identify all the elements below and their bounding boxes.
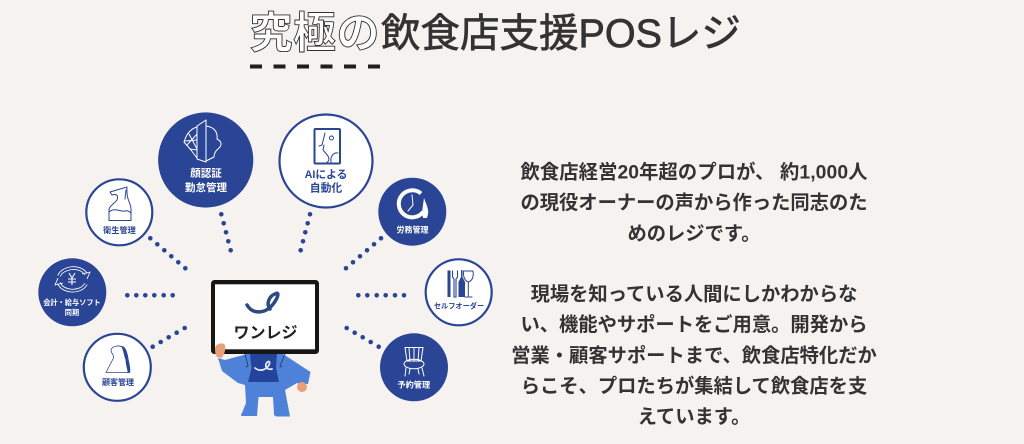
text block: description [511,284,877,428]
node: reservation management [380,333,448,401]
icon: tablet with AI face [314,129,340,164]
central figure: tablet head mascot [211,280,319,416]
node: hygiene management [86,179,152,245]
node: hygiene management: 衛生管理 [103,225,136,235]
node: AI automation: 自動化 [310,180,342,194]
icon: spray bottle [109,187,131,220]
node: reservation management: 予約管理 [397,380,430,390]
title [250,10,741,58]
logo wordmark: ワンレジ [233,325,298,342]
icon: chair [404,348,424,376]
text block: introduction: 飲食店経営20年超のプロが、 約1,000人 [520,160,868,184]
title: 飲食店支援POSレジ [381,12,741,56]
title: 究極の [250,10,380,58]
node: accounting and payroll software sync: 同期 [65,308,79,317]
node: AI automation [280,114,372,208]
dotted connectors [125,212,406,349]
text block: introduction: めのレジです。 [627,223,761,245]
left hand [215,343,225,358]
text block: introduction: の現役オーナーの声から作った同志のた [520,192,868,214]
text block: description: い、機能やサポートをご用意。開発から [520,313,868,336]
node: labor management: 労務管理 [396,224,428,234]
tablet frame [211,280,319,354]
icon: person silhouette [106,346,130,373]
text block: introduction [520,160,868,245]
icon: cutlery, bottle and glass [448,270,473,297]
node: self order [426,259,492,325]
node: customer management: 顧客管理 [102,377,134,387]
text block: description: えています。 [638,406,750,428]
node: labor management [378,178,446,246]
node: face recognition attendance: 顔認証 [190,166,222,180]
figure body [218,354,310,416]
node: face recognition attendance: 勤怠管理 [185,181,227,194]
node: AI automation: AIによる [305,168,347,181]
title underline dashes [250,64,380,68]
tablet screen [215,284,315,349]
logo swoosh [247,293,278,312]
node: face recognition attendance [158,112,253,208]
node: accounting and payroll software sync: 会計・給与ソフト [43,298,101,307]
node: customer management [84,334,151,401]
node: self order: セルフオーダー [434,302,484,310]
text block: description: 営業・顧客サポートまで、飲食店特化だか [511,344,877,367]
text block: description: らこそ、プロたちが集結して飲食店を支 [521,374,867,398]
text block: description: 現場を知っている人間にしかわからな [531,284,857,306]
icon: face [184,120,221,162]
icon: clock plate [399,190,428,218]
icon: yen with circular arrows [55,268,90,291]
node: accounting and payroll software sync [38,258,106,326]
